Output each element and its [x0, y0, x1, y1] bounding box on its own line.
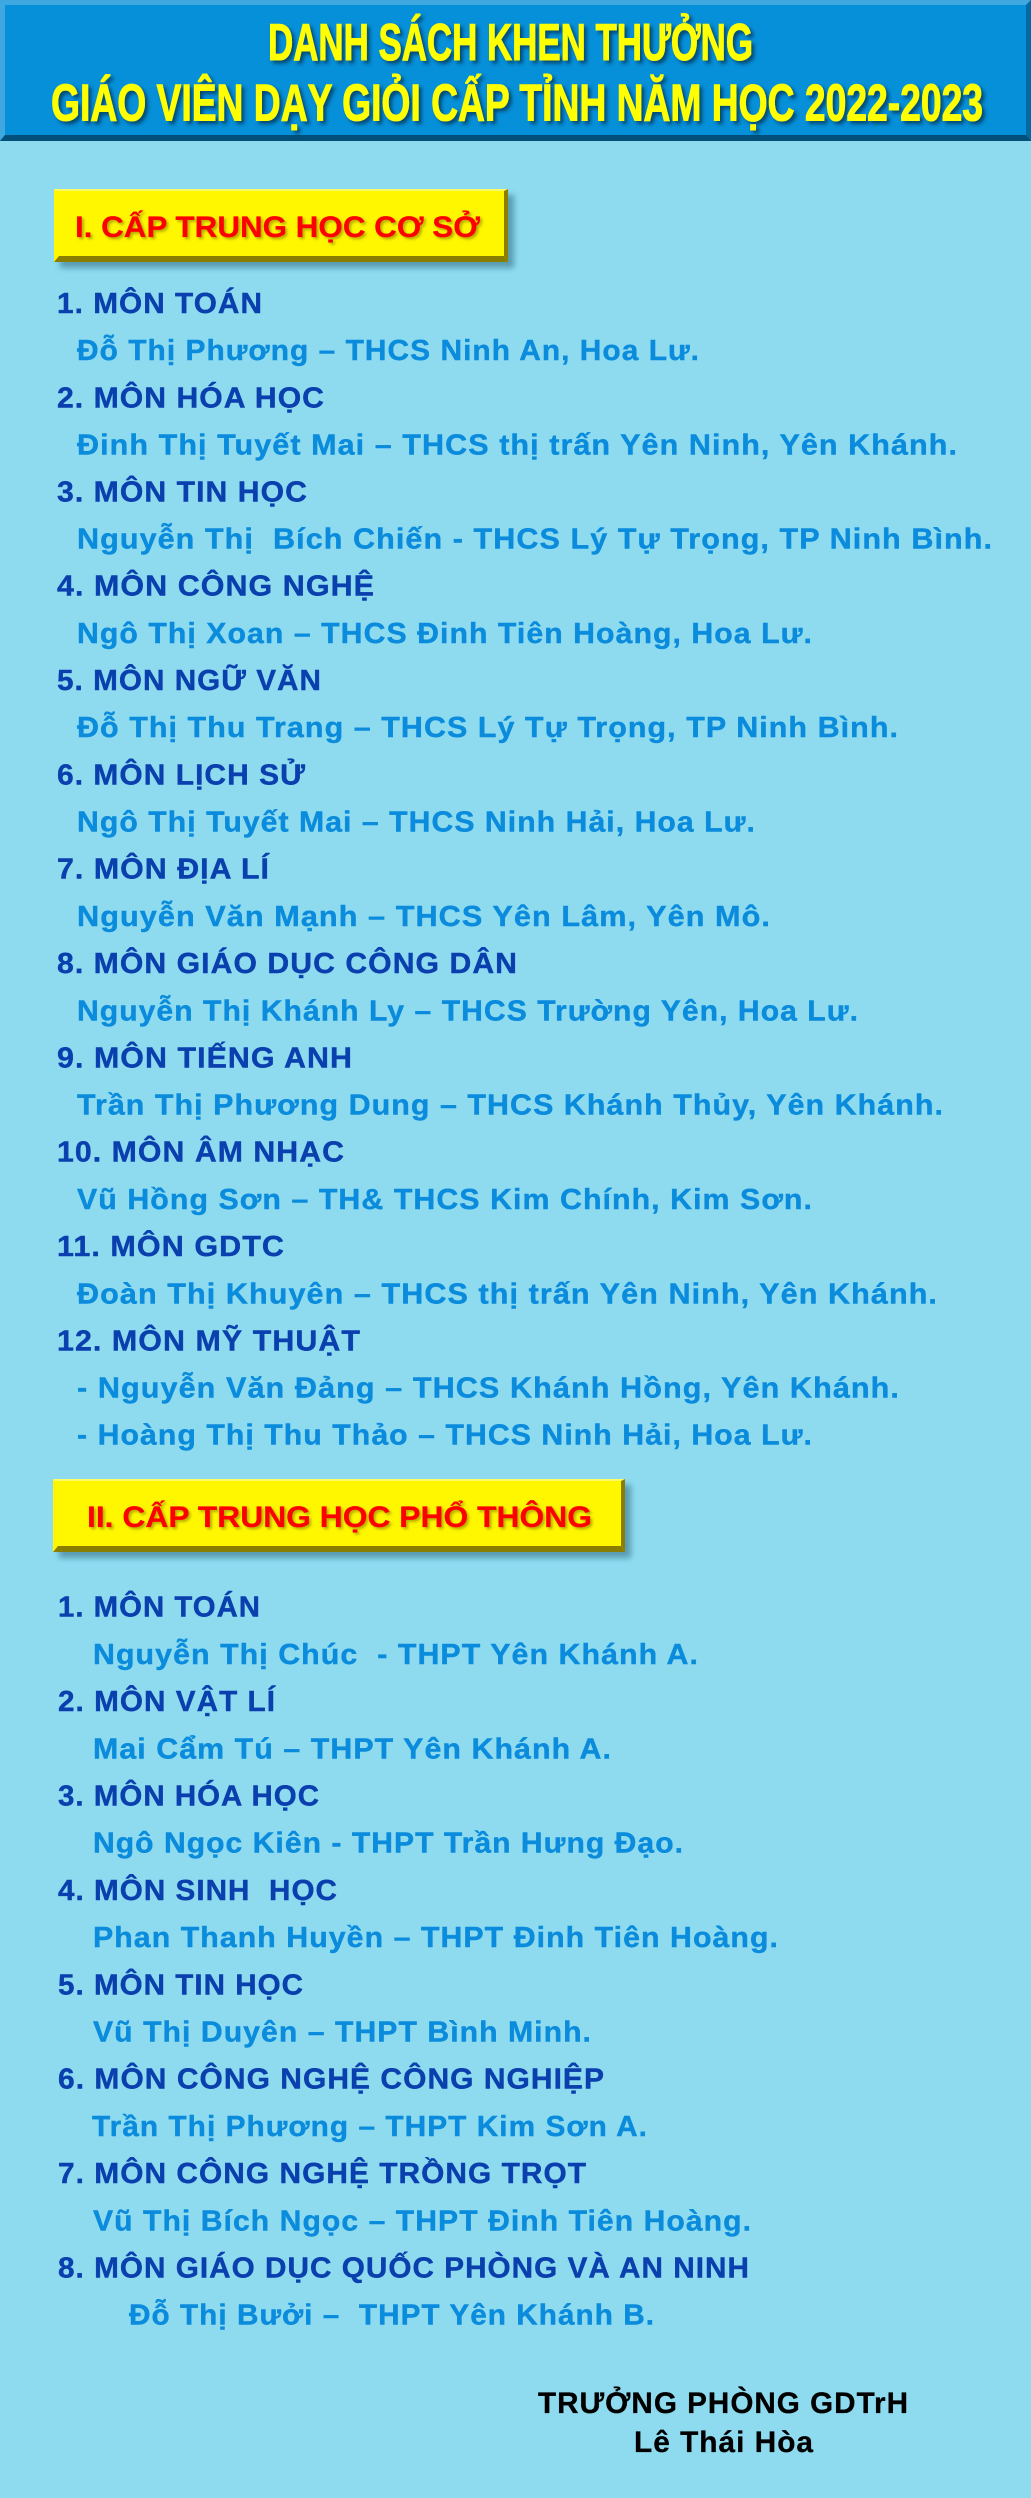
subject II.4: 4. MÔN SINH HỌC: [58, 1873, 338, 1907]
subject II.6: Trần Thị Phương – THPT Kim Sơn A.: [92, 2111, 648, 2143]
subject I.4: 4. MÔN CÔNG NGHỆ: [57, 569, 375, 603]
subject I.11: [57, 1229, 938, 1310]
section heading II: [53, 1479, 625, 1552]
subject I.11: Đoàn Thị Khuyên – THCS thị trấn Yên Ninh, Yên Khánh.: [77, 1278, 938, 1310]
subject II.2: [58, 1684, 612, 1765]
subject I.10: [57, 1135, 813, 1216]
subject I.1: [57, 286, 700, 367]
subject I.6: Ngô Thị Tuyết Mai – THCS Ninh Hải, Hoa Lư.: [77, 807, 756, 839]
subject II.2: 2. MÔN VẬT LÍ: [58, 1684, 276, 1718]
subject II.6: [58, 2062, 648, 2143]
subject I.6: 6. MÔN LỊCH SỬ: [57, 757, 306, 791]
subject I.12: [57, 1323, 900, 1452]
subject II.7: [58, 2156, 752, 2237]
subject I.1: Đỗ Thị Phương – THCS Ninh An, Hoa Lư.: [77, 333, 700, 367]
subject II.8: 8. MÔN GIÁO DỤC QUỐC PHÒNG VÀ AN NINH: [58, 2251, 750, 2285]
section heading I: [54, 189, 508, 262]
section heading II: II. CẤP TRUNG HỌC PHỔ THÔNG: [87, 1500, 592, 1534]
subject I.12: - Hoàng Thị Thu Thảo – THCS Ninh Hải, Hoa Lư.: [77, 1420, 813, 1452]
panel: section I list: [57, 286, 993, 1452]
subject I.8: 8. MÔN GIÁO DỤC CÔNG DÂN: [57, 946, 518, 980]
subject I.12: 12. MÔN MỸ THUẬT: [57, 1323, 361, 1357]
subject II.2: Mai Cẩm Tú – THPT Yên Khánh A.: [93, 1733, 612, 1765]
title: [51, 13, 983, 132]
subject II.1: Nguyễn Thị Chúc - THPT Yên Khánh A.: [93, 1637, 699, 1671]
subject II.7: Vũ Thị Bích Ngọc – THPT Đinh Tiên Hoàng.: [93, 2205, 752, 2237]
subject I.10: 10. MÔN ÂM NHẠC: [57, 1135, 345, 1169]
subject II.5: [58, 1967, 592, 2048]
subject I.3: Nguyễn Thị Bích Chiến - THCS Lý Tự Trọng, TP Ninh Bình.: [77, 522, 993, 556]
subject II.8: Đỗ Thị Bưởi – THPT Yên Khánh B.: [129, 2298, 655, 2332]
signature: [538, 2386, 909, 2459]
subject II.3: Ngô Ngọc Kiên - THPT Trần Hưng Đạo.: [93, 1828, 684, 1860]
subject I.11: 11. MÔN GDTC: [57, 1229, 285, 1263]
subject I.5: Đỗ Thị Thu Trang – THCS Lý Tự Trọng, TP Ninh Bình.: [77, 710, 899, 744]
subject I.3: 3. MÔN TIN HỌC: [57, 475, 308, 509]
subject I.2: 2. MÔN HÓA HỌC: [57, 380, 325, 414]
subject I.5: 5. MÔN NGỮ VĂN: [57, 663, 322, 697]
subject I.6: [57, 757, 756, 839]
subject I.7: [57, 852, 771, 933]
panel: section II list: [58, 1590, 779, 2332]
subject I.9: [57, 1040, 944, 1122]
subject I.4: Ngô Thị Xoan – THCS Đinh Tiên Hoàng, Hoa Lư.: [77, 618, 813, 650]
signature: Lê Thái Hòa: [634, 2426, 814, 2459]
subject I.7: Nguyễn Văn Mạnh – THCS Yên Lâm, Yên Mô.: [77, 899, 771, 933]
subject II.1: [58, 1590, 699, 1671]
subject II.7: 7. MÔN CÔNG NGHỆ TRỒNG TRỌT: [58, 2156, 587, 2190]
subject II.4: Phan Thanh Huyền – THPT Đinh Tiên Hoàng.: [93, 1922, 779, 1954]
subject I.7: 7. MÔN ĐỊA LÍ: [57, 852, 270, 886]
subject I.8: Nguyễn Thị Khánh Ly – THCS Trường Yên, Hoa Lư.: [77, 993, 859, 1027]
header banner: [0, 0, 1031, 141]
subject I.1: 1. MÔN TOÁN: [57, 286, 263, 320]
subject I.9: 9. MÔN TIẾNG ANH: [57, 1040, 353, 1074]
subject II.5: 5. MÔN TIN HỌC: [58, 1967, 304, 2001]
subject I.4: [57, 569, 813, 650]
subject I.9: Trần Thị Phương Dung – THCS Khánh Thủy, Yên Khánh.: [77, 1090, 944, 1122]
subject II.5: Vũ Thị Duyên – THPT Bình Minh.: [93, 2017, 592, 2049]
signature: TRƯỞNG PHÒNG GDTrH: [538, 2386, 909, 2420]
subject II.4: [58, 1873, 779, 1954]
subject I.2: [57, 380, 958, 462]
subject II.3: [58, 1778, 684, 1860]
subject II.1: 1. MÔN TOÁN: [58, 1590, 261, 1624]
title: DANH SÁCH KHEN THƯỞNG: [268, 13, 753, 72]
subject I.10: Vũ Hồng Sơn – TH& THCS Kim Chính, Kim Sơn.: [77, 1184, 813, 1216]
subject II.6: 6. MÔN CÔNG NGHỆ CÔNG NGHIỆP: [58, 2062, 605, 2096]
section heading I: I. CẤP TRUNG HỌC CƠ SỞ: [75, 210, 480, 244]
subject I.3: [57, 475, 993, 556]
subject I.8: [57, 946, 859, 1027]
subject II.8: [58, 2250, 750, 2332]
subject II.3: 3. MÔN HÓA HỌC: [58, 1779, 320, 1813]
subject I.2: Đinh Thị Tuyết Mai – THCS thị trấn Yên Ninh, Yên Khánh.: [77, 429, 958, 461]
subject I.12: - Nguyễn Văn Đảng – THCS Khánh Hồng, Yên Khánh.: [77, 1371, 900, 1405]
subject I.5: [57, 663, 899, 744]
